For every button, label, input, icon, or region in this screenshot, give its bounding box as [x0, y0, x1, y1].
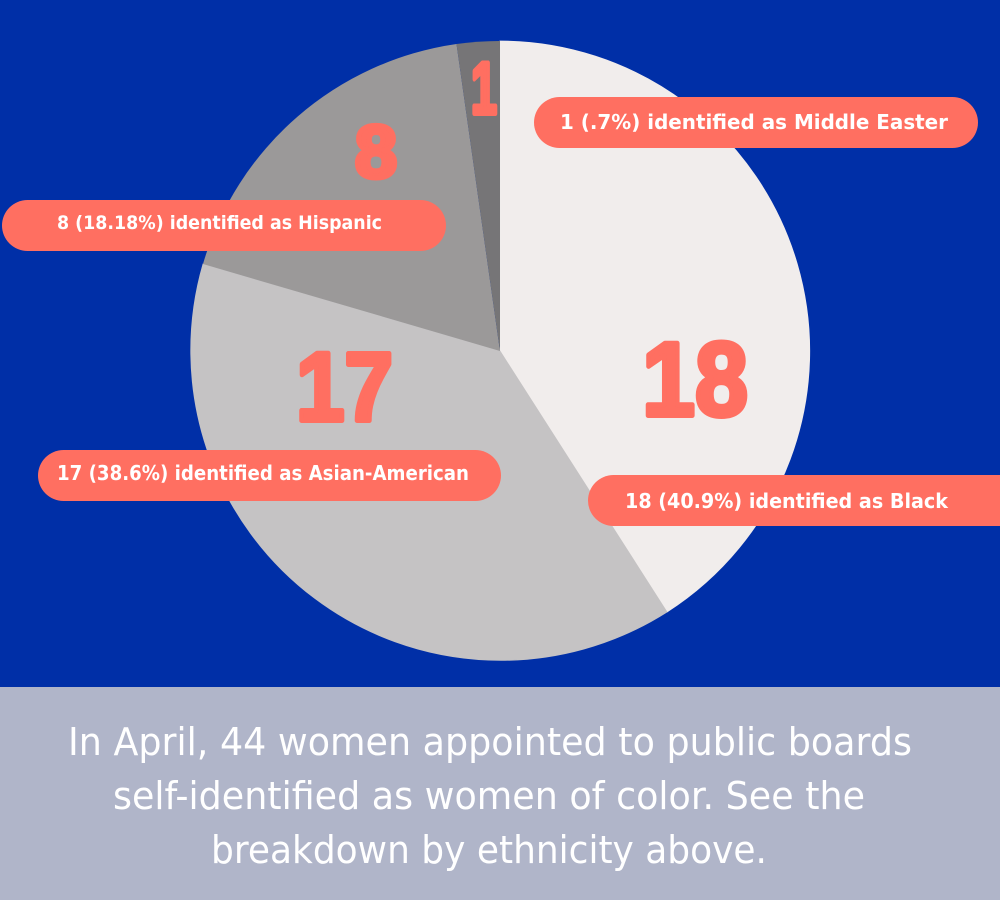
number: 17: 17 — [296, 332, 393, 442]
callout: Black — [588, 475, 1000, 526]
callout: Hispanic — [2, 200, 446, 251]
slice: Middle Eastern — [456, 41, 500, 351]
background — [0, 0, 1000, 687]
caption text — [68, 720, 912, 873]
callout: Middle Eastern — [534, 97, 978, 148]
callout: Middle Eastern: 1 (.7%) identified as Middle Easter — [560, 110, 949, 134]
number: 1: 1 — [471, 48, 497, 130]
slice: Black — [500, 41, 810, 612]
callout: Black: 18 (40.9%) identified as Black — [625, 489, 949, 513]
number: 18: 18 — [642, 322, 748, 438]
callout: Hispanic: 8 (18.18%) identified as Hispanic — [57, 212, 382, 234]
callout: Asian-American: 17 (38.6%) identified as Asian-American — [57, 461, 469, 485]
caption text: self-identified as women of color. See the — [113, 774, 865, 819]
caption panel — [0, 687, 1000, 900]
caption text: breakdown by ethnicity above. — [211, 828, 767, 873]
caption text: In April, 44 women appointed to public boards — [68, 720, 912, 765]
number: 8: 8 — [355, 110, 397, 194]
slice: Hispanic — [203, 44, 500, 351]
callout: Asian-American — [38, 450, 501, 501]
slice: Asian-American — [191, 264, 667, 660]
pie chart — [191, 41, 810, 660]
